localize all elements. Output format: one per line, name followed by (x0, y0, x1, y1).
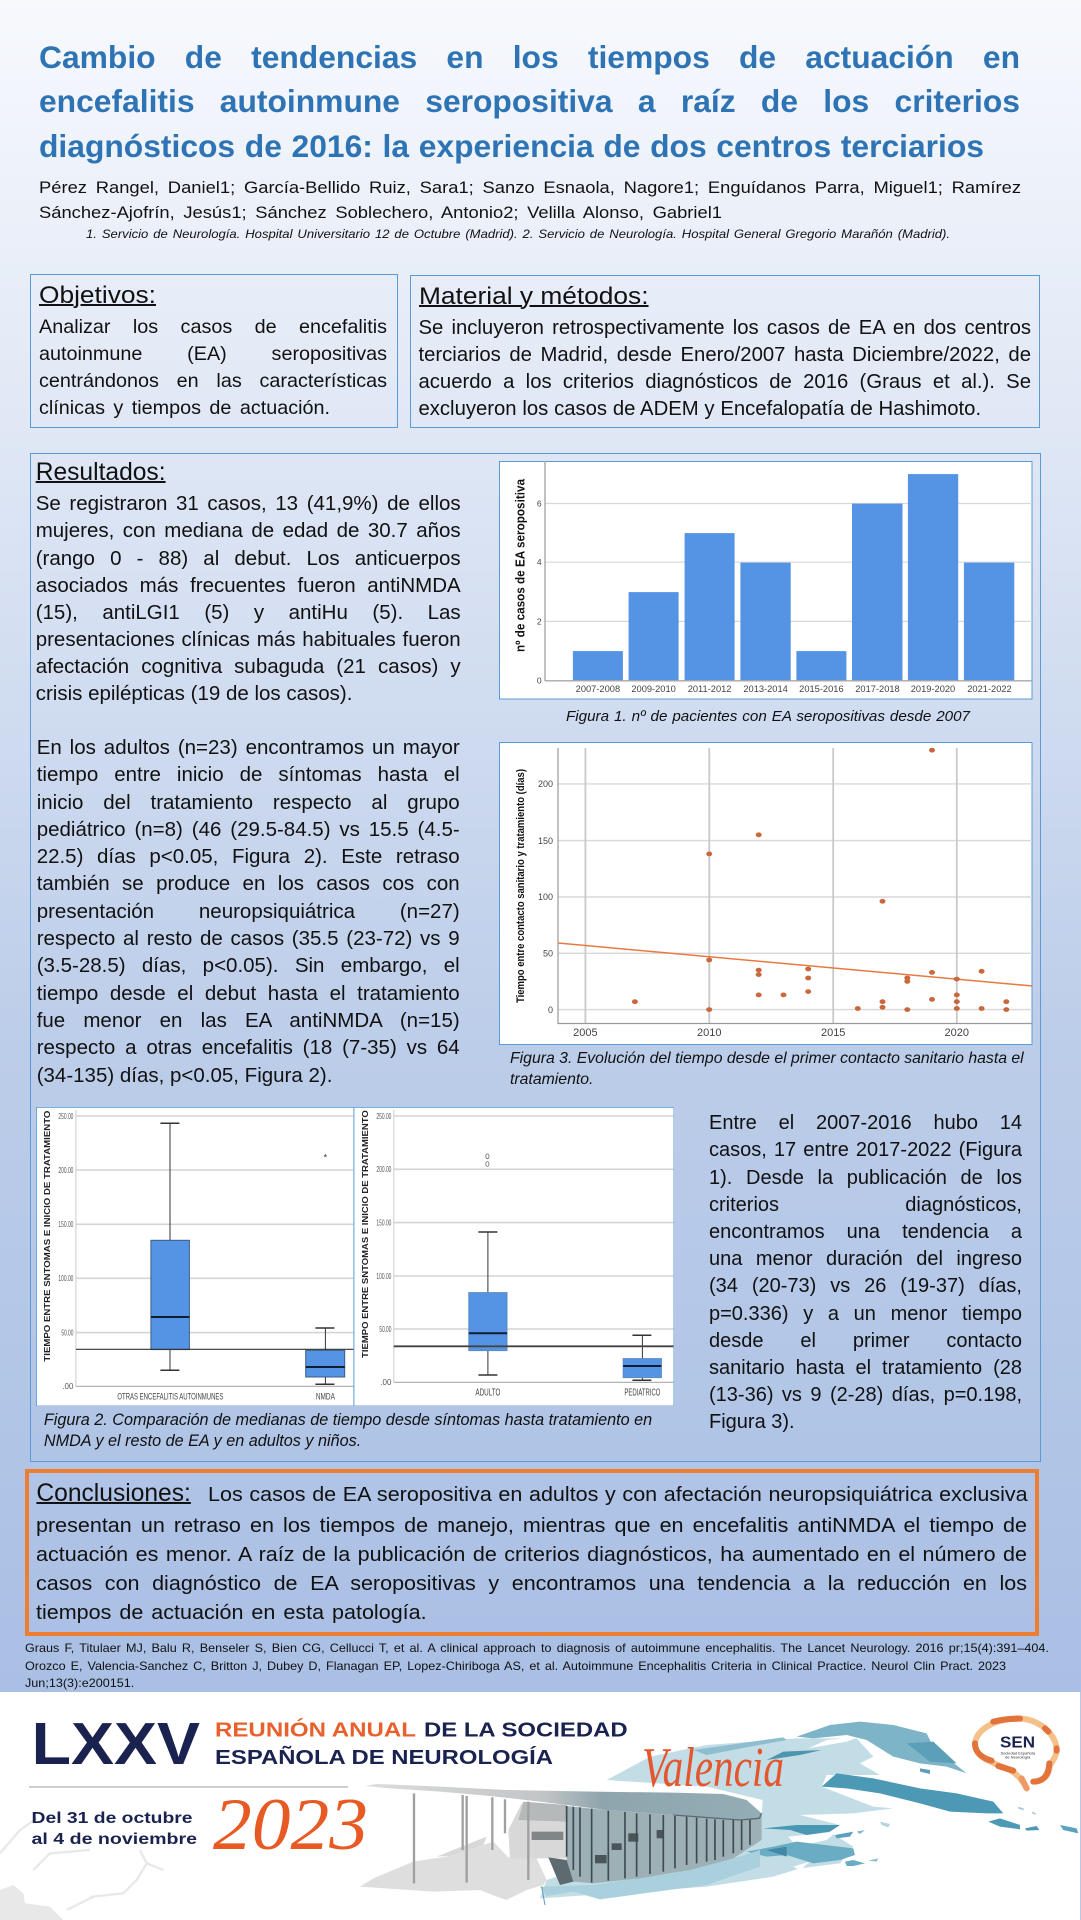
text: resultados paragraph 1 (36, 492, 461, 705)
authors: Pérez Rangel, Daniel1; García-Bellido Ruiz, Sara1; Sanzo Esnaola, Nagore1; Enguídanos Parra, Miguel1; Ramírez (39, 178, 1021, 197)
text: resultados paragraph 3: 1). Desde la publicación de los (709, 1167, 1022, 1189)
logo: SEN: Sociedad Española (1000, 1750, 1036, 1755)
text: resultados paragraph 3: criterios diagnósticos, (709, 1194, 1022, 1216)
logo: SEN: SEN (1000, 1734, 1035, 1751)
caption: figura 2: NMDA y el resto de EA y en adultos y niños. (44, 1432, 361, 1450)
caption: figura 2 (44, 1411, 652, 1450)
text: objetivos: centrándonos en las características (39, 370, 387, 392)
text: resultados paragraph 2: respecto a otras encefalitis (18 (7-35) vs 64 (37, 1036, 460, 1059)
box plot: NMDA vs otras: NMDA (315, 1391, 335, 1402)
box plot: NMDA vs otras: .00 (62, 1382, 74, 1391)
title: Cambio de tendencias en los tiempos de actuación en (39, 39, 1020, 75)
x axis labels: 2011-2012 (688, 684, 731, 694)
text: material y metodos (418, 316, 1031, 420)
dates: al 4 de noviembre (32, 1831, 197, 1848)
x axis labels: 2007-2008 (576, 684, 620, 694)
box plot: NMDA vs otras: * (323, 1152, 327, 1162)
text: resultados paragraph 1: (rango 0 - 88) al debut. Los anticuerpos (36, 547, 461, 570)
caption: figura 2: Figura 2. Comparación de medianas de tiempo desde síntomas hasta tratamiento en (44, 1411, 652, 1429)
data points (632, 748, 1009, 1012)
text: resultados paragraph 3: casos, 17 entre 2017-2022 (Figura (709, 1139, 1022, 1161)
y axis ticks (537, 498, 542, 686)
references: Jun;13(3):e200151. (25, 1676, 134, 1690)
panel: conclusiones (25, 1468, 1039, 1636)
x axis labels: 2010 (697, 1027, 722, 1039)
text: resultados paragraph 3: Entre el 2007-2016 hubo 14 (709, 1112, 1022, 1134)
references (25, 1641, 1049, 1690)
x axis labels: 2013-2014 (743, 684, 788, 694)
title: diagnósticos de 2016: la experiencia de dos centros terciarios (39, 128, 984, 164)
trend line (558, 943, 1032, 986)
heading: reunion anual: DE LA SOCIEDAD (424, 1720, 628, 1742)
caption: figura 1: Figura 1. nº de pacientes con EA seropositivas desde 2007 (566, 708, 970, 725)
chart: figura 3 scatter plot (499, 742, 1033, 1045)
heading: reunion anual (215, 1718, 628, 1769)
x axis labels: 2009-2010 (631, 684, 676, 694)
heading: material y metodos: Material y métodos: (418, 283, 648, 310)
text: resultados paragraph 2: inicio del tratamiento respecto al grupo (37, 791, 460, 814)
text: material y metodos: terciarios de Madrid, desde Enero/2007 hasta Diciembre/2022, de (418, 344, 1031, 366)
text: resultados paragraph 2 (37, 736, 460, 1087)
y axis title: nº de casos de EA seropositiva (514, 478, 528, 652)
text: resultados paragraph 1: Se registraron 31 casos, 13 (41,9%) de ellos (36, 492, 461, 515)
box plot: adulto vs pediatrico: 100.00 (376, 1271, 391, 1280)
text: resultados paragraph 1: mujeres, con mediana de edad de 30.7 años (36, 519, 461, 542)
text: resultados paragraph 3: encontramos una tendencia a (709, 1221, 1022, 1243)
text: conclusiones body: actuación es menor. A raíz de la publicación de criterios diagnósticos, ha aumentado en el número de (36, 1543, 1027, 1566)
box plot: NMDA vs otras: 100.00 (58, 1274, 73, 1283)
heading: reunion anual: REUNIÓN ANUAL (215, 1718, 416, 1742)
text: resultados paragraph 3: una menor duración del ingreso (709, 1248, 1022, 1270)
y axis ticks: 100 (538, 892, 553, 902)
year 2023: 2023 (213, 1784, 368, 1866)
bars (573, 474, 1014, 681)
text: conclusiones body: tiempos de actuación en esta patología. (36, 1601, 427, 1624)
heading: reunion anual: ESPAÑOLA DE NEUROLOGÍA (215, 1746, 553, 1769)
text: resultados paragraph 2: (34-135) días, p<0.05, Figura 2). (37, 1064, 332, 1087)
heading: objetivos: Objetivos: (39, 282, 156, 309)
panel: objetivos (30, 274, 398, 428)
box plot: NMDA vs otras: 200.00 (58, 1165, 73, 1174)
text: material y metodos: Se incluyeron retrospectivamente los casos de EA en dos centros (418, 316, 1031, 338)
text: resultados paragraph 1: presentaciones clínicas más habituales fueron (36, 628, 461, 651)
box plot: adulto vs pediatrico: 50.00 (379, 1324, 391, 1333)
illustration: watercolor and building (540, 1722, 1078, 1898)
y axis ticks: 150 (538, 836, 553, 846)
heading: LXXV: LXXV (32, 1711, 200, 1777)
box plot: NMDA vs otras: 50.00 (61, 1328, 73, 1337)
references: Orozco E, Valencia-Sanchez C, Britton J, Dubey D, Flanagan EP, Lopez-Chiriboga AS, et al. Autoimmune Encephalitis Criteria in Clinical Practice. Neurol Clin Pract. 2023 (25, 1659, 1006, 1673)
y axis ticks: 4 (537, 557, 542, 567)
box plot: NMDA vs otras: 150.00 (58, 1220, 73, 1229)
text: resultados paragraph 3: (13-36) vs 9 (2-28) días, p=0.198, (709, 1384, 1022, 1406)
text: resultados paragraph 2: también se produce en los casos cos con (37, 872, 460, 895)
box plot: adulto vs pediatrico: 250.00 (376, 1111, 391, 1120)
text: resultados paragraph 2: fue menor en las EA antiNMDA (n=15) (37, 1009, 460, 1032)
x axis labels: 2005 (573, 1027, 598, 1039)
text: resultados paragraph 2: tiempo entre inicio de síntomas hasta el (37, 763, 460, 786)
references: Graus F, Titulaer MJ, Balu R, Benseler S, Bien CG, Cellucci T, et al. A clinical approach to diagnosis of autoimmune encephalitis. The Lancet Neurology. 2016 pr;15(4):391–404. (25, 1641, 1049, 1655)
caption: figura 3: tratamiento. (510, 1071, 593, 1088)
heading: conclusiones: Conclusiones: (36, 1480, 191, 1506)
heading: resultados: Resultados: (36, 458, 166, 486)
text: resultados paragraph 1: (15), antiLGI1 (5) y antiHu (5). Las (36, 601, 461, 624)
text: resultados paragraph 2: En los adultos (n=23) encontramos un mayor (37, 736, 460, 759)
box plot: NMDA vs otras (43, 1110, 353, 1402)
caption: figura 3 (510, 1050, 1024, 1088)
text: conclusiones body: casos con diagnóstico de EA seropositivas y encontramos una tendencia a la reducción en los (36, 1572, 1027, 1595)
chart: figura 1 bar chart (499, 461, 1032, 700)
box plot: adulto vs pediatrico: ADULTO (475, 1387, 500, 1398)
panel: material y metodos (410, 275, 1040, 428)
y axis ticks: 50 (543, 948, 553, 958)
banner: congress footer (0, 1692, 1081, 1920)
chart: figura 2 box plots (36, 1107, 674, 1406)
x axis labels: 2017-2018 (855, 684, 900, 694)
y axis ticks: 6 (537, 498, 542, 508)
x axis labels: 2020 (945, 1027, 969, 1039)
y axis ticks: 2 (537, 616, 542, 626)
box plot: NMDA vs otras: 250.00 (58, 1111, 73, 1120)
box plot: NMDA vs otras: OTRAS ENCEFALITIS AUTOINMUNES (117, 1391, 223, 1402)
title (39, 39, 1020, 164)
text: resultados paragraph 1: afectación cognitiva subaguda (21 casos) y (36, 655, 461, 678)
text: resultados paragraph 3 (709, 1112, 1022, 1433)
text: resultados paragraph 2: respecto al resto de casos (35.5 (23-72) vs 9 (37, 927, 460, 950)
logo: SEN (975, 1718, 1057, 1788)
text: conclusiones body: presentan un retraso en los tiempos de manejo, mientras que en encefalitis antiNMDA el tiempo de (36, 1514, 1027, 1537)
text: resultados paragraph 2: presentación neuropsiquiátrica (n=27) (37, 900, 460, 923)
text: material y metodos: excluyeron los casos de ADEM y Encefalopatía de Hashimoto. (418, 398, 981, 420)
y axis ticks: 0 (537, 676, 542, 686)
box plot: NMDA vs otras: TIEMPO ENTRE SNTOMAS E INICIO DE TRATAMIENTO (43, 1110, 52, 1361)
x axis labels: 2015 (821, 1027, 845, 1039)
caption: figura 3: Figura 3. Evolución del tiempo desde el primer contacto sanitario hasta el (510, 1050, 1024, 1067)
text: objetivos: Analizar los casos de encefalitis (39, 316, 387, 338)
text: conclusiones body (36, 1514, 1027, 1624)
box plot: adulto vs pediatrico: 150.00 (376, 1218, 391, 1227)
text: objetivos (39, 316, 387, 419)
authors: Sánchez-Ajofrín, Jesús1; Sánchez Soblechero, Antonio2; Velilla Alonso, Gabriel1 (39, 203, 722, 222)
x axis labels: 2019-2020 (911, 684, 955, 694)
text: resultados paragraph 2: (3.5-28.5) días, p<0.05). Sin embargo, el (37, 954, 460, 977)
text: resultados paragraph 2: pediátrico (n=8) (46 (29.5-84.5) vs 15.5 (4.5- (37, 818, 460, 841)
text: objetivos: clínicas y tiempos de actuación. (39, 397, 330, 419)
text: conclusiones first line: Los casos de EA seropositiva en adultos y con afectación neuropsiquiátrica exclusiva (208, 1483, 1028, 1506)
y axis ticks (538, 779, 553, 1015)
text: resultados paragraph 2: 22.5) días p<0.05, Figura 2). Este retraso (37, 845, 460, 868)
dates: Del 31 de octubre (32, 1810, 193, 1827)
text: resultados paragraph 3: Figura 3). (709, 1411, 795, 1433)
authors (39, 178, 1021, 222)
box plot: adulto vs pediatrico: TIEMPO ENTRE SNTOMAS E INICIO DE TRATAMIENTO (361, 1110, 370, 1358)
title: encefalitis autoinmune seropositiva a raíz de los criterios (39, 83, 1020, 119)
box plot: adulto vs pediatrico: .00 (380, 1378, 392, 1387)
x axis labels: 2021-2022 (967, 684, 1012, 694)
decoration: grey map veins (0, 1818, 163, 1920)
x axis labels (573, 1027, 969, 1039)
text: material y metodos: acuerdo a los criterios diagnósticos de 2016 (Graus et al.). Se (418, 370, 1031, 392)
text: objetivos: autoinmune (EA) seropositivas (39, 343, 387, 365)
text: resultados paragraph 3: (34 (20-73) vs 26 (19-37) días, (709, 1275, 1022, 1297)
box plot: adulto vs pediatrico: 200.00 (376, 1165, 391, 1174)
y axis ticks: 200 (538, 779, 553, 789)
panel: resultados (30, 453, 1041, 1462)
x axis labels (576, 684, 1012, 694)
text: resultados paragraph 1: crisis epilépticas (19 de los casos). (36, 682, 352, 705)
logo: SEN: de Neurología (1005, 1754, 1031, 1760)
text: resultados paragraph 3: desde el primer contacto (709, 1330, 1022, 1352)
text: Valencia: Valencia (642, 1737, 784, 1799)
box plot: adulto vs pediatrico (361, 1110, 673, 1398)
y axis ticks: 0 (548, 1005, 553, 1015)
text: resultados paragraph 3: p=0.336) y a un menor tiempo (709, 1303, 1022, 1325)
text: resultados paragraph 1: asociados más frecuentes fueron antiNMDA (36, 574, 461, 597)
affiliations: 1. Servicio de Neurología. Hospital Universitario 12 de Octubre (Madrid). 2. Servicio de Neurología. Hospital General Gregorio Marañón (Madrid). (86, 227, 950, 241)
x axis labels: 2015-2016 (799, 684, 844, 694)
text: resultados paragraph 2: tiempo desde el debut hasta el tratamiento (37, 982, 460, 1005)
dates (32, 1810, 197, 1848)
text: resultados paragraph 3: sanitario hasta el tratamiento (28 (709, 1357, 1022, 1379)
